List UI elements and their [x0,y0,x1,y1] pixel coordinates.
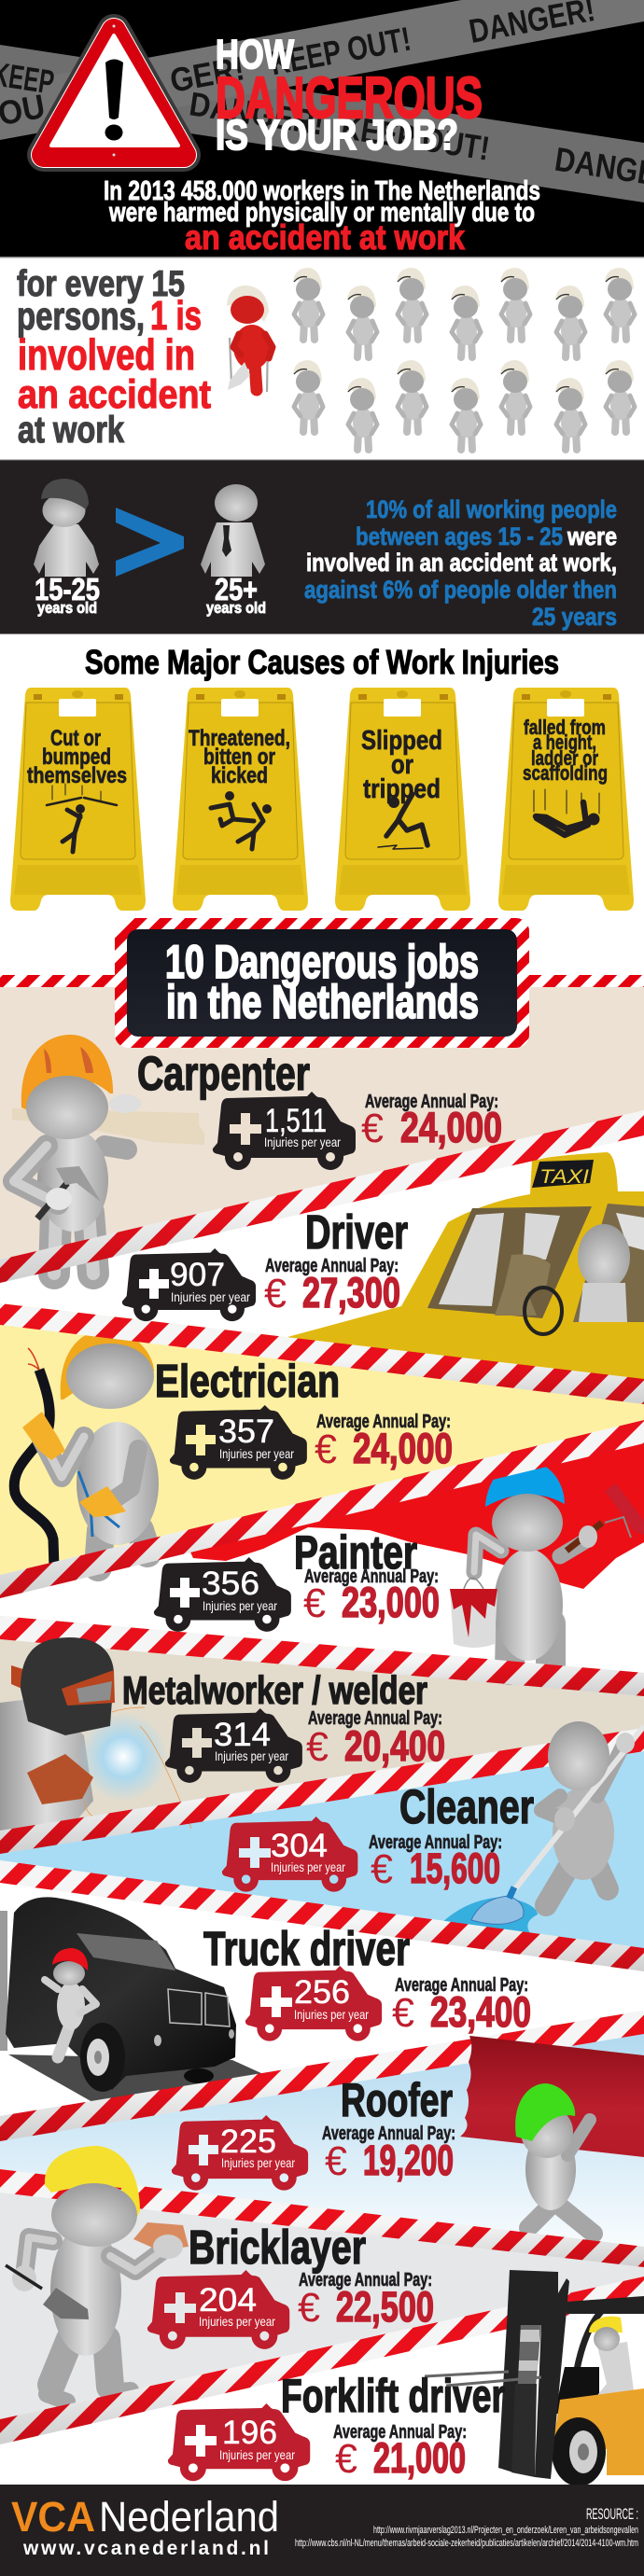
title: DANGEROUS [216,66,483,131]
ambulance: injuries [213,1092,356,1170]
age labels: years old [37,599,97,617]
title: IS YOUR JOB? [216,111,458,159]
panel: fall sign: a height, [533,731,596,754]
statement text: an accident [18,372,211,417]
barrier tape [0,2277,644,2444]
ambulance: injuries: Injuries per year [215,1748,288,1763]
ambulance: injuries: 357 [218,1413,274,1450]
ambulance: injuries: 1,511 [265,1103,327,1139]
statement text: at work [18,410,125,451]
job: electrician: Electrician [155,1357,340,1407]
panel: slipped sign: tripped [363,774,441,804]
illustration: roofer [515,2083,594,2234]
panel: fall sign: ladder or [531,746,598,770]
intro text: an accident at work [185,218,465,257]
barrier tape [0,2011,644,2141]
ambulance: injuries [165,1708,302,1783]
panel: threatened sign [173,688,308,911]
pay: € [325,2138,347,2184]
job: bricklayer [147,2221,434,2349]
pay: Average Annual Pay: [365,1092,498,1112]
ambulance: injuries [168,2403,310,2481]
pay: 27,300 [302,1269,400,1316]
pay: Average Annual Pay: [265,1256,399,1276]
pay: 23,400 [430,1988,531,2036]
panel: slipped sign: Slipped [361,726,442,756]
warning tapes: KEEP OUT! [267,20,413,82]
pay [264,1256,400,1316]
barrier tape [0,1728,644,1854]
pay [303,1566,440,1626]
panel: cut or bumped sign: themselves [27,763,127,788]
warning tapes [0,0,644,202]
ambulance: injuries: Injuries per year [219,1446,294,1461]
job: carpenter: Carpenter [137,1047,310,1100]
pay: Average Annual Pay: [304,1566,439,1587]
ambulance: injuries [154,1557,291,1632]
pay [369,1832,502,1892]
icon: kicking figures [211,791,272,849]
illustration: electrician [14,1330,159,1567]
job: metalworker: Metalworker / welder [122,1668,427,1712]
pay: € [264,1271,287,1316]
ambulance: injuries: 225 [220,2123,276,2160]
pay [333,2422,467,2482]
footer [0,2485,644,2576]
illustration: bricklayer [6,2146,189,2402]
title: HOW [216,32,294,77]
icon: older worker with tie [201,484,265,577]
ambulance: injuries [222,1817,357,1892]
statement text: 1 is [150,293,202,339]
red paint splash [187,1427,644,1589]
ambulance: injuries: Injuries per year [271,1859,345,1874]
pay: € [361,1106,384,1151]
pay: € [315,1427,337,1472]
icon: young worker [34,479,99,577]
ambulance: injuries [172,2115,308,2191]
icon: falling figure [534,789,599,835]
illustration: carpenter [12,1035,204,1274]
age labels: years old [206,599,266,617]
ambulance: injuries: 907 [170,1257,225,1293]
icon: falling object [47,784,117,852]
job: roofer [172,2074,455,2191]
banner: 10 dangerous jobs: 10 Dangerous jobs [165,936,479,988]
illustration: cleaner [440,1721,644,1933]
pay [361,1092,502,1151]
ambulance: injuries: Injuries per year [264,1135,341,1149]
pay: 24,000 [400,1104,502,1151]
ambulance: injuries: 204 [199,2282,257,2318]
logo: Nederland [99,2493,279,2541]
job section backgrounds [0,975,644,2485]
statistic text: were [567,522,617,550]
job: metalworker [122,1668,445,1783]
illustration: welder [0,1637,191,1847]
ambulance: injuries: Injuries per year [203,1598,277,1613]
logo: www.vcanederland.nl [22,2538,269,2559]
pay: € [303,1580,326,1626]
ambulance: injuries: Injuries per year [294,2007,369,2022]
panel: fall sign: scaffolding [523,761,608,785]
panel: threatened sign: Threatened, [189,726,290,751]
ambulance: injuries [122,1248,256,1321]
pay [298,2270,434,2331]
job: truck driver [203,1922,531,2041]
pay: 15,600 [410,1845,500,1892]
illustration: taxi [287,1152,644,1381]
panel: cut or bumped sign: bumped [42,745,111,770]
pay: € [371,1846,393,1892]
warning tapes: DANGER! [187,84,327,143]
pay: Average Annual Pay: [395,1975,528,1996]
ambulance: injuries: Injuries per year [171,1289,250,1304]
job: driver: Driver [305,1205,408,1259]
sources [295,2505,638,2549]
statement text: persons, [17,294,145,338]
statement text [17,264,211,451]
statistic text: between ages 15 - 25 [356,522,563,550]
ambulance: injuries [245,1966,382,2041]
title [216,32,483,159]
age labels: 25+ [215,572,258,606]
job: electrician [155,1357,453,1480]
ambulance: injuries: Injuries per year [221,2155,295,2170]
panel: age comparison [0,459,644,634]
ambulance: injuries: 356 [202,1566,259,1602]
illustration: forklift [425,2270,644,2486]
barrier tapes upper [0,1110,644,1696]
illustration: truck with driver [0,1897,263,2102]
pay: 19,200 [363,2137,454,2184]
header panel [0,0,644,258]
pay: 23,000 [342,1579,440,1626]
job: forklift driver: Forklift driver [281,2370,505,2422]
age labels [35,572,266,617]
intro text: were harmed physically or mentally due to [108,198,535,228]
job: roofer: Roofer [341,2074,453,2126]
pay: € [298,2285,320,2331]
pay: Average Annual Pay: [322,2123,455,2144]
pay [315,1412,453,1472]
panel: slipped sign: or [391,750,413,780]
pay [392,1975,531,2036]
intro text [104,176,540,257]
panel: slipped sign [335,688,470,911]
ambulance: injuries: 196 [222,2415,277,2451]
pay: € [392,1990,414,2036]
pay: Average Annual Pay: [299,2270,432,2291]
job: painter: Painter [294,1526,417,1579]
job: cleaner: Cleaner [399,1780,534,1833]
job: painter [154,1526,440,1632]
ambulance: injuries: 314 [214,1717,271,1753]
ambulance: injuries: 304 [271,1828,328,1864]
ambulance: injuries: Injuries per year [199,2314,275,2329]
statement text: for every 15 [17,264,185,304]
logo [11,2493,279,2559]
job: bricklayer: Bricklayer [189,2221,366,2274]
job: cleaner [222,1780,534,1892]
panel: threatened sign: kicked [211,763,268,788]
ambulance: injuries [147,2270,289,2349]
panel: fall sign: falled from [524,716,606,739]
ambulance: injuries: 256 [294,1974,350,2011]
ambulance: injuries: Injuries per year [219,2447,295,2462]
warning tapes: GER! [167,49,247,100]
panel: cut or bumped sign: Cut or [50,726,101,751]
job: driver [122,1205,408,1321]
warning triangle icon [44,24,184,157]
job: carpenter [137,1047,502,1170]
pay: 21,000 [373,2434,466,2482]
warning tapes: KEEP OUT! [339,107,492,168]
pay: 20,400 [344,1722,445,1770]
illustration: taxi: TAXI [539,1166,589,1188]
pay: Average Annual Pay: [316,1412,451,1432]
pay [322,2123,455,2184]
barrier tape [0,1860,644,1971]
grey helmet figures [293,268,635,450]
pay [306,1708,445,1770]
icon: slipping figure [378,794,427,849]
icon: greater than [116,508,184,577]
illustration: painter [450,1460,644,1670]
panel: cut or bumped sign [10,688,146,911]
job: forklift driver [168,2370,505,2482]
age labels: 15-25 [35,572,100,606]
banner: 10 dangerous jobs: in the Netherlands [166,976,479,1028]
pay: Average Annual Pay: [369,1832,502,1853]
panel: 1 in 15 [17,264,635,451]
panel: threatened sign: bitten or [203,745,275,770]
job: truck driver: Truck driver [203,1922,410,1975]
statement text: involved in [18,330,195,379]
barrier tape [0,2169,644,2267]
pay: 24,000 [353,1425,453,1472]
pay: Average Annual Pay: [333,2422,467,2443]
banner: 10 dangerous jobs [0,918,644,1048]
statistic text [304,495,617,631]
pay: 22,500 [336,2283,434,2331]
logo: VCA [11,2493,95,2541]
pay: Average Annual Pay: [308,1708,442,1729]
panel: fall sign [498,688,634,911]
ambulance: injuries [170,1405,307,1480]
pay: € [306,1724,329,1770]
pay: € [335,2436,357,2482]
statistic text: 25 years [532,603,617,631]
illustration: roof sheet [460,2036,644,2157]
icon: injured red figure with crutches [227,285,273,392]
